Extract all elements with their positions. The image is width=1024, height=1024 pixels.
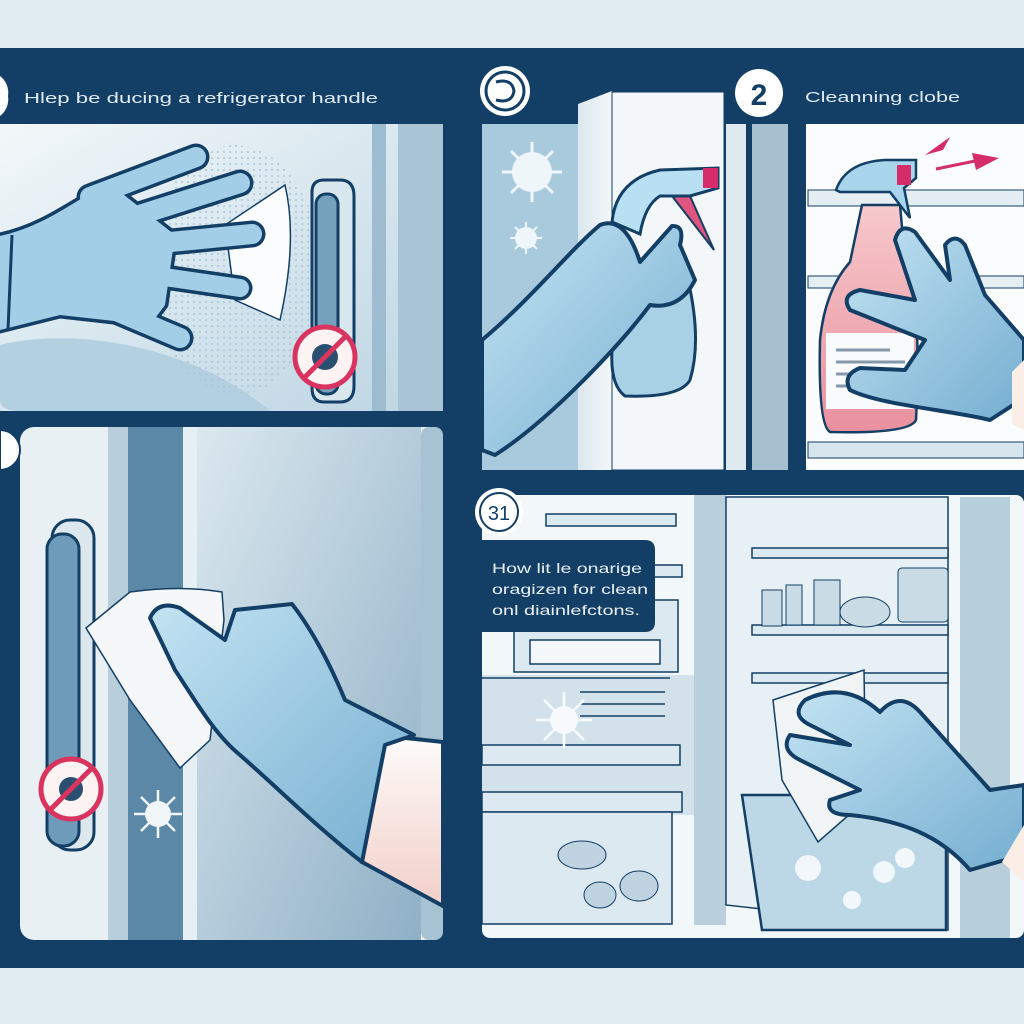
icon: virus [134, 790, 182, 838]
icon: cloth [86, 588, 224, 768]
panel: step 2 shelf and bottle [806, 124, 1024, 470]
icon: cloth [773, 670, 866, 842]
icon: sleeve [1002, 825, 1024, 882]
heading: panel 1 title: Hlep be ducing a refrigerator handle [24, 90, 378, 107]
icon: virus large [502, 142, 562, 202]
panel: step 4 open fridge [482, 495, 1024, 938]
bottom drawer [742, 795, 946, 930]
icon: virus small [510, 222, 542, 254]
callout: how to clean [482, 540, 655, 632]
number badge 2: 2 [751, 79, 767, 112]
panel: step 3 fridge door [20, 427, 443, 940]
icon: gloved hand [0, 157, 252, 338]
fridge shelves right [752, 548, 948, 683]
sleeve [1012, 360, 1024, 430]
food in drawer [558, 841, 658, 908]
icon: spray bottle [612, 168, 718, 396]
arrow: spray direction [925, 137, 999, 170]
icon: gloved hand [787, 692, 1024, 870]
icon: virus [536, 692, 592, 748]
panel: step 2 spray left [482, 91, 788, 470]
panel: step 1 handle wipe [0, 124, 443, 411]
icon: no sign [41, 759, 101, 819]
icon: no germs sign [295, 327, 355, 387]
number badge partial top left [0, 76, 8, 116]
heading: cleaning clobe: Cleanning clobe [805, 89, 960, 106]
food jars on shelf [762, 568, 948, 627]
number badge 3 [475, 488, 523, 536]
callout: how to clean: oragizen for clean [492, 581, 648, 597]
icon: door handle [312, 180, 354, 402]
fridge shelves left [482, 514, 682, 924]
number badge 3: 31 [488, 503, 510, 525]
icons: germs in drawer [795, 848, 915, 909]
icon: glove cuff [8, 235, 12, 330]
icon: handle [52, 520, 94, 850]
icon: gloved hand on bottle [847, 228, 1024, 420]
callout: how to clean: How lit le onarige [492, 560, 642, 576]
icon: gloved hand [150, 604, 414, 862]
number badge 2 [735, 69, 783, 117]
icon: sleeve [362, 735, 443, 906]
number badge left [480, 66, 530, 116]
icon: pink bottle [820, 160, 918, 432]
icon: gloved hand with spray [482, 223, 695, 455]
callout: how to clean: onl diainlefctons. [492, 602, 640, 618]
number badge partial left [0, 430, 20, 470]
icon: cloth [225, 185, 290, 320]
